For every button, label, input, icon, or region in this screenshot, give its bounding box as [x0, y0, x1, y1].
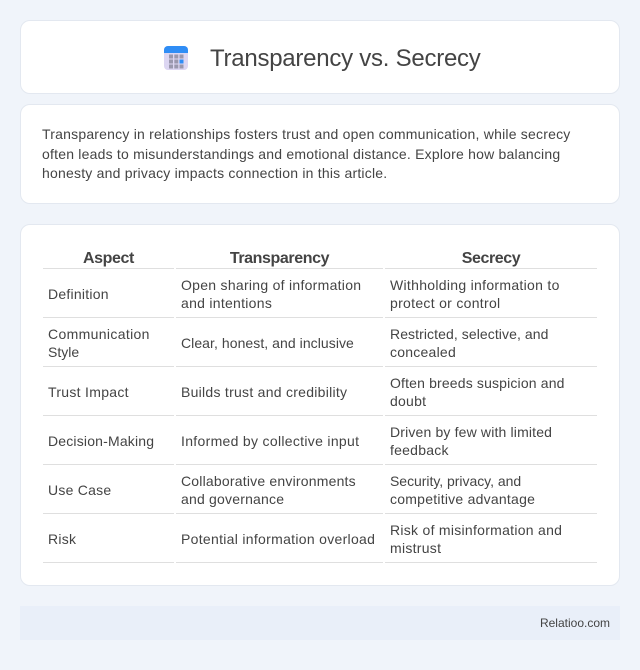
communication secrecy: Restricted, selective, and	[390, 326, 548, 342]
decision secrecy: Driven by few with limited	[390, 424, 552, 440]
communication secrecy: concealed	[390, 344, 456, 360]
footer text: Relatioo.com	[540, 616, 610, 630]
use case transparency: and governance	[181, 491, 284, 507]
row: definition: Definition	[48, 286, 109, 302]
use case transparency: Collaborative environments	[181, 473, 356, 489]
trust secrecy: doubt	[390, 393, 426, 409]
intro text	[42, 126, 571, 181]
title card	[20, 20, 620, 94]
footer bar	[20, 606, 620, 640]
decision transparency: Informed by collective input	[181, 433, 359, 449]
intro text: honesty and privacy impacts connection in this article.	[42, 165, 387, 181]
header: aspect: Aspect	[83, 250, 134, 267]
decision secrecy: feedback	[390, 442, 449, 458]
use case secrecy: Security, privacy, and	[390, 473, 521, 489]
row: communication style: Style	[48, 344, 79, 360]
trust secrecy	[390, 375, 565, 409]
row: use case: Use Case	[48, 482, 111, 498]
definition secrecy	[390, 277, 560, 311]
definition transparency: Open sharing of information	[181, 277, 361, 293]
use case transparency	[181, 473, 356, 507]
communication secrecy	[390, 326, 548, 360]
use case secrecy	[390, 473, 535, 507]
row: communication style: Communication	[48, 326, 150, 342]
risk secrecy: Risk of misinformation and	[390, 522, 562, 538]
definition transparency: and intentions	[181, 295, 272, 311]
communication transparency: Clear, honest, and inclusive	[181, 335, 354, 351]
intro text: Transparency in relationships fosters trust and open communication, while secrecy	[42, 126, 571, 142]
intro text: often leads to misunderstandings and emotional distance. Explore how balancing	[42, 146, 560, 162]
use case secrecy: competitive advantage	[390, 491, 535, 507]
decision secrecy	[390, 424, 552, 458]
row: communication style	[48, 326, 150, 360]
definition secrecy: protect or control	[390, 295, 500, 311]
header: transparency: Transparency	[230, 250, 329, 267]
risk secrecy: mistrust	[390, 540, 441, 556]
definition secrecy: Withholding information to	[390, 277, 560, 293]
icon: calendar	[164, 46, 188, 70]
risk transparency: Potential information overload	[181, 531, 375, 547]
table card	[20, 224, 620, 586]
row: risk: Risk	[48, 531, 76, 547]
trust secrecy: Often breeds suspicion and	[390, 375, 565, 391]
row: trust impact: Trust Impact	[48, 384, 129, 400]
trust transparency: Builds trust and credibility	[181, 384, 347, 400]
row: decision-making: Decision-Making	[48, 433, 154, 449]
header: secrecy: Secrecy	[462, 250, 520, 267]
intro card	[20, 104, 620, 204]
definition transparency	[181, 277, 361, 311]
risk secrecy	[390, 522, 562, 556]
title: Transparency vs. Secrecy	[210, 45, 481, 72]
